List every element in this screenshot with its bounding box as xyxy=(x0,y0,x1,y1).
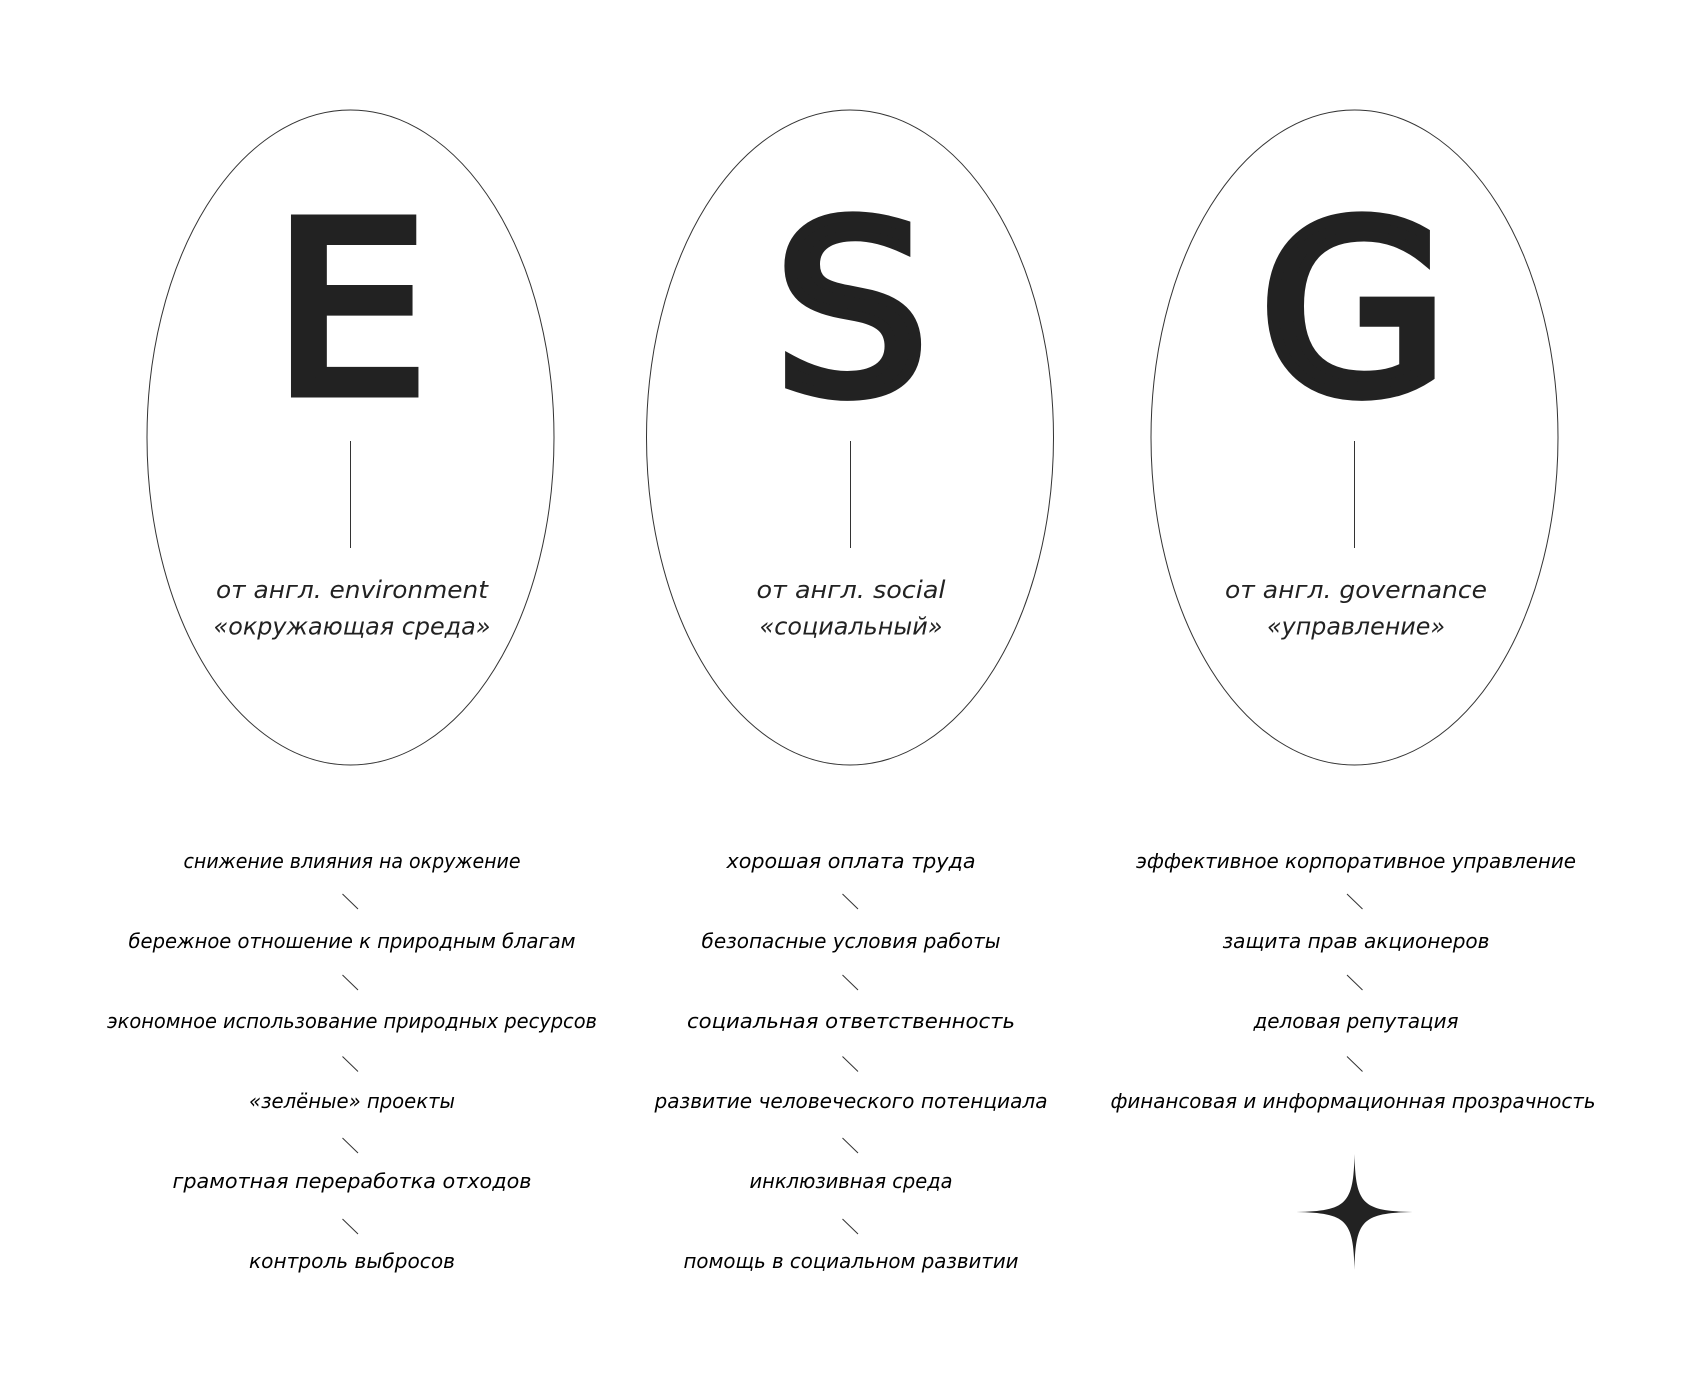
list: governance factors: эффективное корпоративное управление xyxy=(1136,849,1576,873)
list: governance factors: защита прав акционеров xyxy=(1222,929,1490,953)
list: social factors: развитие человеческого потенциала xyxy=(653,1089,1048,1113)
vertical divider E xyxy=(350,441,352,548)
list: social factors: помощь в социальном развитии xyxy=(684,1249,1018,1273)
oval outline S xyxy=(646,110,1054,765)
oval outline G xyxy=(1151,110,1558,765)
panel: E environment oval xyxy=(147,110,554,765)
list: environment factors: контроль выбросов xyxy=(249,1249,455,1273)
text: environment subtitle xyxy=(214,576,490,640)
vertical divider G xyxy=(1354,441,1356,548)
list: governance factors: финансовая и информационная прозрачность xyxy=(1110,1089,1596,1113)
list: environment factors: экономное использование природных ресурсов xyxy=(107,1009,597,1033)
list: social factors: инклюзивная среда xyxy=(750,1169,952,1193)
oval outline E xyxy=(147,110,554,765)
list: environment factors: снижение влияния на окружение xyxy=(184,849,520,873)
text: social subtitle xyxy=(756,576,946,640)
text: governance subtitle: «управление» xyxy=(1267,612,1445,640)
heading: letter E: E xyxy=(272,173,428,448)
text: governance subtitle: от англ. governance xyxy=(1225,576,1487,604)
text: social subtitle: от англ. social xyxy=(756,576,946,604)
icon: four-pointed star xyxy=(1296,1154,1412,1270)
text: governance subtitle xyxy=(1225,576,1487,640)
list: governance factors xyxy=(1110,849,1596,1113)
text: social subtitle: «социальный» xyxy=(760,612,942,640)
panel: S social oval xyxy=(646,110,1054,765)
list: environment factors xyxy=(107,849,597,1273)
list: social factors xyxy=(653,849,1048,1273)
list: social factors: хорошая оплата труда xyxy=(725,849,976,873)
list: social factors: безопасные условия работы xyxy=(702,929,1000,953)
list: social factors: социальная ответственность xyxy=(687,1009,1015,1033)
list: environment factors: грамотная переработка отходов xyxy=(172,1169,532,1193)
vertical divider S xyxy=(850,441,852,548)
list: governance factors: деловая репутация xyxy=(1253,1009,1458,1033)
text: environment subtitle: «окружающая среда» xyxy=(214,612,490,640)
text: environment subtitle: от англ. environment xyxy=(216,576,490,604)
list: environment factors: «зелёные» проекты xyxy=(249,1089,455,1113)
heading: letter G: G xyxy=(1259,173,1449,448)
list: environment factors: бережное отношение к природным благам xyxy=(128,929,576,953)
panel: G governance oval xyxy=(1151,110,1558,765)
heading: letter S: S xyxy=(774,173,929,448)
